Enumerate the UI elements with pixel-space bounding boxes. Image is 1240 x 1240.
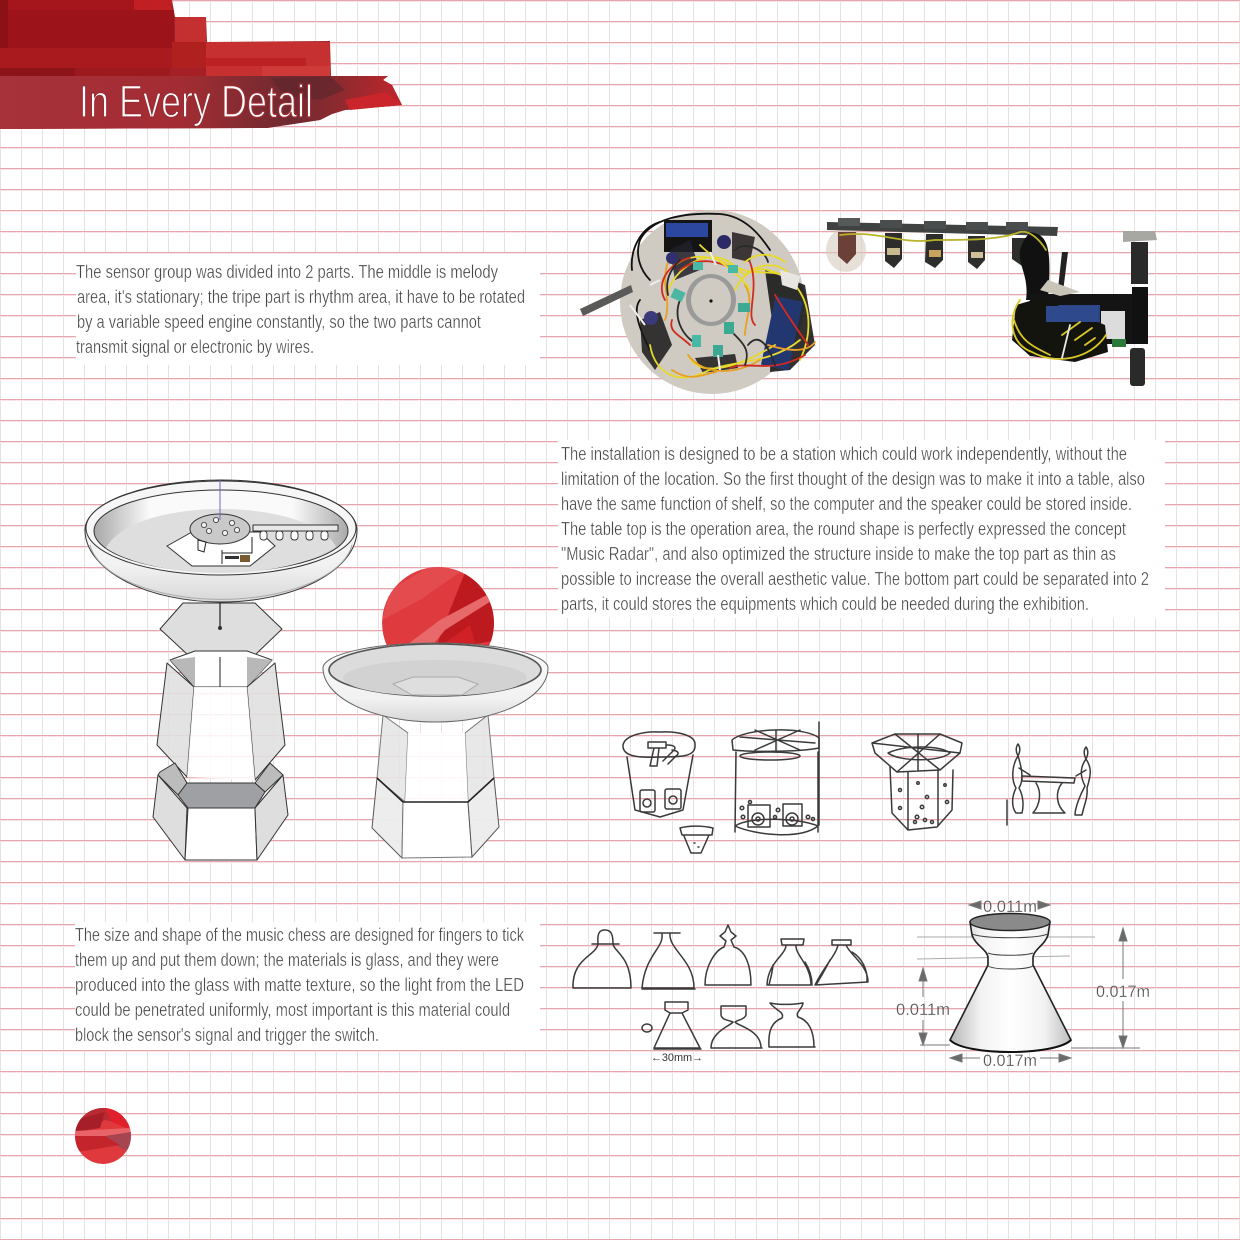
- text block: sensor group: The sensor group was divided into 2 parts. The middle is melody: [76, 262, 498, 282]
- dimension labels: 0.017m: [1096, 982, 1150, 1001]
- bottle sketches of music chess: [573, 925, 868, 1049]
- text block: installation design: The table top is the operation area, the round shape is perfectly expressed the concept: [561, 519, 1126, 539]
- text block: sensor group: area, it's stationary; the tripe part is rhythm area, it have to be rotated: [77, 287, 525, 307]
- title: In Every Detail: [79, 76, 313, 127]
- text block: installation design: The installation is designed to be a station which could work independently, without the: [561, 444, 1127, 464]
- text block: installation design: parts, it could stores the equipments which could be needed during the exhibition.: [561, 594, 1089, 614]
- dimension labels: [896, 897, 1150, 1070]
- title banner: red brush strokes: [0, 0, 402, 129]
- handwritten 30mm dimension: ←30mm→: [651, 1052, 703, 1064]
- text block: music chess: them up and put them down; the materials is glass, and they were: [75, 950, 499, 970]
- red circle page marker: [75, 1108, 131, 1164]
- chess piece model with dimensions: [896, 897, 1150, 1070]
- text block: music chess: [75, 922, 540, 1050]
- photo: round sensor plate with wiring: [580, 210, 815, 394]
- text block: installation design: [558, 440, 1165, 618]
- text block: music chess: could be penetrated uniformly, most important is this material could: [75, 1000, 510, 1020]
- photo: sensor assembly side view: [826, 218, 1157, 386]
- text block: music chess: produced into the glass with matte texture, so the light from the LED: [75, 975, 524, 995]
- text block: music chess: block the sensor's signal and trigger the switch.: [75, 1025, 379, 1045]
- text block: music chess: The size and shape of the music chess are designed for fingers to tick: [75, 925, 525, 945]
- dimension labels: 0.017m: [983, 1051, 1037, 1070]
- text block: sensor group: transmit signal or electronic by wires.: [76, 337, 314, 357]
- text block: sensor group: [76, 254, 540, 365]
- text block: sensor group: by a variable speed engine constantly, so the two parts cannot: [77, 312, 481, 332]
- concept sketches of the table: [623, 722, 1090, 853]
- exploded table model: [85, 480, 357, 860]
- assembled table model: [323, 643, 548, 858]
- dimension labels: 0.011m: [983, 897, 1037, 916]
- red circle behind table: [382, 567, 494, 646]
- dimension labels: 0.011m: [896, 1000, 950, 1019]
- text block: installation design: "Music Radar", and also optimized the structure inside to make the top part as thin as: [561, 544, 1116, 564]
